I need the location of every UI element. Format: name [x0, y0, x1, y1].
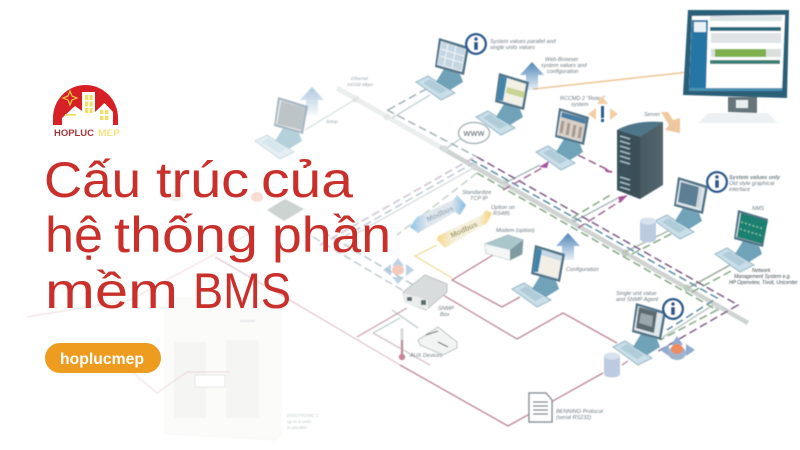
arrow: modbus rs485	[437, 210, 492, 248]
faded arrow up	[300, 87, 324, 115]
faded computer left	[255, 97, 308, 159]
label: document: (serial RS232)	[556, 415, 591, 421]
logo: red dome	[53, 85, 118, 125]
logo: star	[63, 91, 77, 105]
thermometer	[399, 328, 405, 360]
label: SNMP box: Box	[440, 312, 450, 318]
faded labels: Ethernet	[351, 76, 369, 81]
tag pill: hoplucmep	[60, 351, 144, 368]
label: web browser	[541, 57, 587, 75]
title: thống	[114, 207, 258, 263]
alarm right	[660, 336, 695, 360]
label: relay	[560, 96, 606, 108]
server	[617, 122, 663, 199]
logo	[53, 85, 118, 139]
faded labels	[326, 76, 374, 124]
faded UPS cabinet: ENISTRONIC 1	[287, 413, 319, 418]
label: document: BENNING Protocol	[556, 409, 604, 415]
label: network management: Network	[752, 268, 771, 274]
label: system values: System values parallel and	[490, 39, 557, 45]
large monitor screenshot	[683, 10, 789, 123]
label: network management: HP Openview, Tivoli, Unicenter	[729, 280, 798, 286]
alarm left	[383, 258, 414, 284]
label: single unit: Single unit value	[616, 291, 656, 297]
computer: single unit	[613, 303, 666, 365]
label: modem: Modem (option)	[496, 228, 535, 234]
faded UPS cabinet: in parallel	[287, 425, 307, 430]
label: network management	[729, 268, 798, 286]
icon: info top	[465, 33, 487, 55]
speech bubble: www: WWW	[463, 129, 486, 138]
faded network card and ups icon	[168, 191, 304, 221]
label: old graphical	[729, 175, 781, 193]
title	[44, 152, 391, 319]
label: old graphical: System values only	[729, 175, 781, 181]
label: web browser: system values and	[541, 63, 587, 69]
arrow: modbus tcp: Modbus	[425, 204, 455, 224]
database upper	[640, 218, 656, 242]
computer: web browser	[476, 73, 529, 135]
label: system values	[490, 39, 557, 51]
red signal lines	[357, 255, 628, 426]
label: document	[556, 409, 604, 421]
label: network management: Management System e.g.	[734, 274, 791, 280]
computer: configuration	[512, 245, 565, 307]
tag pill	[45, 343, 161, 373]
label: configuration: Configuration	[566, 267, 599, 273]
orange link to large screen	[533, 69, 717, 89]
title: BMS	[193, 263, 291, 319]
label: SNMP box	[438, 306, 454, 318]
label: server: Server	[644, 112, 661, 118]
faded UPS cabinet	[165, 298, 319, 440]
label: standard tcp: Standardize	[462, 190, 491, 196]
arrow: server orange	[661, 112, 680, 133]
logo: wordmark accent: MEP	[98, 128, 121, 139]
arrow: modbus tcp	[410, 195, 466, 233]
icon: info middle	[706, 171, 728, 193]
database lower	[604, 352, 620, 378]
title: mềm	[45, 263, 178, 319]
label: old graphical: interface	[729, 187, 750, 193]
faded red signal lines	[27, 233, 250, 393]
computer: old graphical	[655, 177, 708, 239]
icon: info lower	[662, 298, 684, 320]
faded UPS cabinet: socomec	[240, 318, 256, 323]
label: web browser: Web-Browser	[545, 57, 579, 63]
title: trúc	[156, 152, 249, 208]
computer: system values	[416, 38, 469, 100]
label: option rs485	[491, 205, 515, 217]
faded labels: 10/100 Mbps	[347, 82, 374, 87]
label: SNMP box: SNMP	[438, 306, 454, 312]
label: relay: RCCMD 2 "Relay"	[560, 96, 606, 102]
label: AUX devices: AUX Devices	[409, 353, 443, 359]
label: web browser: configuration	[547, 69, 578, 75]
document	[529, 393, 552, 422]
computer: NMS	[715, 210, 768, 272]
faded red line to the bottom right	[215, 257, 400, 365]
AUX device	[418, 327, 457, 355]
yellow modbus line	[415, 245, 452, 278]
title: của	[261, 152, 353, 208]
modem	[485, 235, 523, 260]
title: phần	[272, 207, 391, 263]
label: standard tcp	[462, 190, 491, 202]
dashed network lines	[313, 88, 738, 353]
label: standard tcp: TCP IP	[470, 196, 488, 202]
arrow: modbus rs485: Modbus	[449, 220, 479, 240]
logo: wordmark: HOPLUC	[54, 128, 94, 139]
arrow: web browser up	[520, 62, 544, 90]
label: single unit	[616, 291, 659, 303]
faded UPS cabinet: up to 8 units	[287, 419, 312, 424]
title: hệ	[45, 207, 103, 263]
arrow: configuration up	[556, 233, 580, 260]
logo: white buildings	[62, 92, 113, 126]
label: option rs485: RS485	[493, 211, 511, 217]
label: relay: system	[571, 102, 589, 108]
speech bubble: www	[458, 122, 490, 144]
icon: relay person with arrows	[588, 96, 618, 122]
faded labels: Setup	[326, 119, 338, 124]
title: Cấu	[44, 152, 141, 208]
label: option rs485: Option on	[491, 205, 515, 211]
label: old graphical: Old style graphical	[729, 181, 775, 187]
label: system values: single units values	[490, 45, 535, 51]
backbone bus	[337, 88, 748, 323]
purple direction arrows	[539, 161, 628, 203]
logo: windows	[65, 95, 108, 120]
computer: relay	[536, 108, 589, 170]
label: single unit: and SNMP Agent	[616, 297, 659, 303]
label: NMS: NMS	[752, 206, 765, 212]
solid grey connectors	[305, 95, 730, 337]
SNMP box	[403, 275, 447, 310]
